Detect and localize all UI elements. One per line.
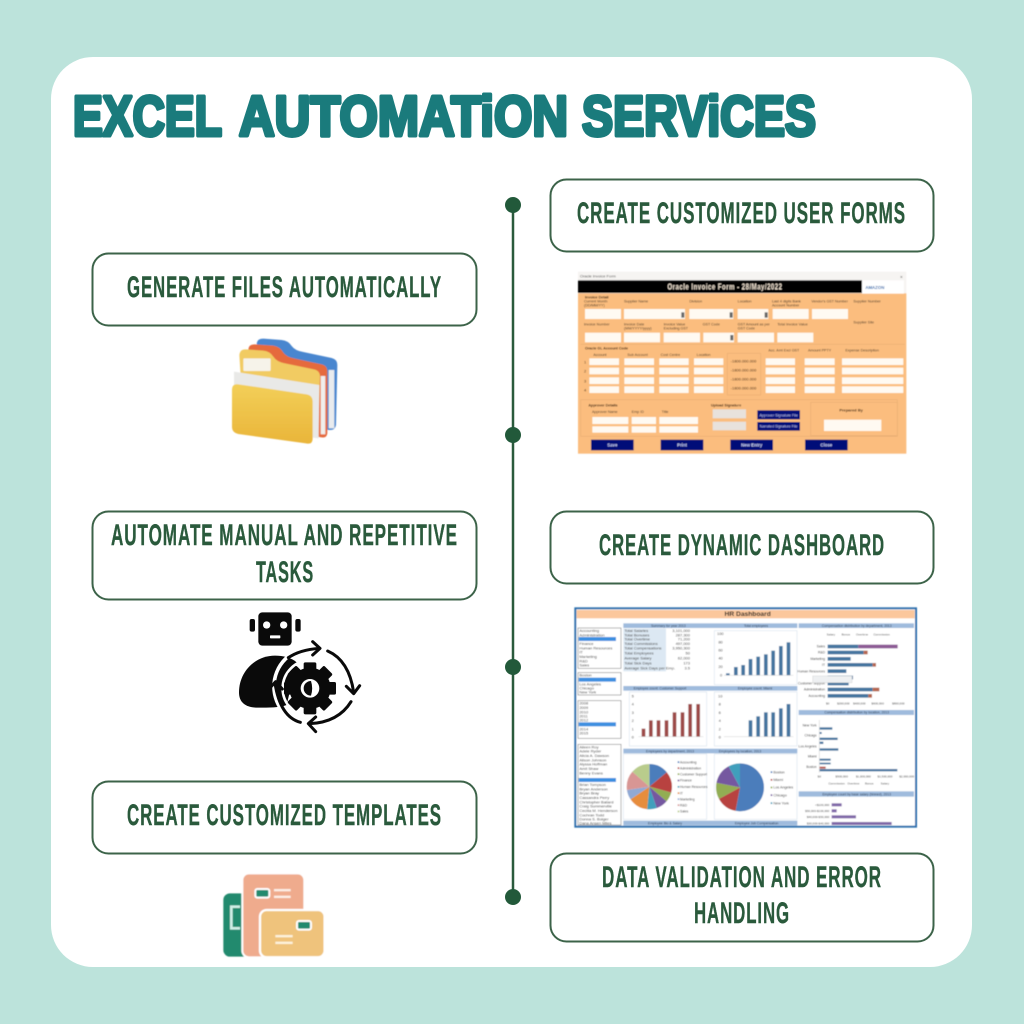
HR dashboard screenshot: Benny Evans [579, 770, 603, 775]
HR dashboard screenshot: Compensation distribution by location, 2013 [824, 711, 889, 715]
top row fields [585, 309, 848, 342]
row numbers and amounts: 2 [584, 369, 587, 374]
form field labels: Acc. Amt Excl GST [768, 349, 800, 353]
horizontal bars: compensation by location: Overtime [847, 782, 860, 786]
horizontal bars: compensation by department: $600,000 [871, 701, 884, 705]
summary table: Total Salaries [624, 628, 648, 633]
HR dashboard screenshot: 6 [719, 710, 722, 715]
box: create dynamic dashboard [550, 512, 934, 584]
horizontal bars: compensation by location: Los Angeles [799, 744, 817, 748]
HR dashboard screenshot: 80 [718, 639, 724, 644]
form field labels: Approver Name [592, 410, 618, 414]
pie legend: department: Customer Support [680, 772, 707, 776]
summary table: Total Commissions [624, 641, 658, 646]
HR dashboard screenshot: 20 [718, 664, 724, 669]
HR dashboard screenshot: 0 [719, 734, 722, 739]
HR dashboard screenshot: Dana Ansen Miles [579, 821, 611, 826]
HR dashboard screenshot: 2010 [579, 709, 589, 714]
pie legend: department: R&D [680, 803, 688, 807]
box: data validation and error handling [550, 854, 934, 942]
title [73, 84, 816, 148]
form field labels: Invoice Value [664, 323, 685, 327]
form field labels: Cost Centre [661, 353, 680, 357]
summary table: Total Sick Days [624, 660, 652, 665]
HR dashboard screenshot: 40 [718, 656, 724, 661]
form field labels: (MM/YYYY/yyyy) [624, 327, 652, 331]
horizontal bars: compensation by department: Sales [817, 645, 825, 649]
horizontal bars: compensation by department: Human Resources [797, 669, 825, 673]
HR dashboard screenshot: 2015 [579, 731, 589, 736]
invoice form screenshot [578, 272, 906, 454]
form field labels [584, 295, 882, 414]
row numbers and amounts: -1800.000.000 [731, 386, 757, 391]
HR dashboard screenshot: 60 [718, 647, 724, 652]
HR dashboard screenshot: HR Dashboard [725, 611, 771, 618]
pie legend: department: IT [680, 791, 683, 795]
horizontal bars: compensation by department: $400,000 [853, 701, 866, 705]
HR dashboard screenshot: Total employees [744, 624, 768, 628]
form field labels: Division [689, 299, 702, 303]
horizontal bars: compensation by department: Bonus [842, 633, 851, 637]
invoice form screenshot: AMAZON [865, 285, 884, 290]
form field labels: Oracle GL Account Code [585, 346, 628, 350]
HR dashboard screenshot: 100 [717, 631, 724, 636]
HR dashboard screenshot [575, 608, 916, 827]
form field labels: Amount PPTY [808, 349, 832, 353]
row numbers and amounts: -1800.000.000 [731, 358, 757, 363]
HR dashboard screenshot: Human Resources [579, 645, 612, 650]
horizontal bars: salary bins [805, 803, 892, 826]
pie legend: location: Miami [773, 778, 783, 782]
HR dashboard screenshot: Cecilia M. Henderson [579, 808, 617, 813]
box: automate manual and repetitive tasks: AUTOMATE MANUAL AND REPETITIVE [111, 519, 458, 552]
form field labels: GST Code [738, 327, 755, 331]
pie chart: by department [638, 775, 661, 798]
HR dashboard screenshot: 0 [720, 672, 723, 677]
horizontal bars: salary bins: $40,000-$50,000 [807, 815, 830, 819]
HR dashboard screenshot: Brian Tompson [579, 782, 606, 787]
form field labels: Excluding GST [664, 327, 689, 331]
HR dashboard screenshot: Aileen Roy [579, 744, 599, 749]
row numbers and amounts: -1800.000.000 [731, 377, 757, 382]
horizontal bars: compensation by location: Chicago [804, 734, 817, 738]
summary table: 62,000 [678, 656, 691, 661]
pie legend: department [678, 760, 708, 814]
row numbers and amounts: 3 [584, 378, 587, 383]
HR dashboard screenshot: Chicago [579, 686, 595, 691]
HR dashboard screenshot: Bryan Anderson [579, 786, 608, 791]
horizontal bars: compensation by department: R&D [818, 651, 826, 655]
HR dashboard screenshot: 2014 [579, 727, 589, 732]
HR dashboard screenshot: Craig Summerville [579, 804, 613, 809]
row numbers and amounts: -1800.000.000 [731, 368, 757, 373]
vertical timeline [505, 197, 521, 905]
HR dashboard screenshot: Alyssa Hoffman [579, 762, 607, 767]
summary table: 173 [683, 660, 691, 665]
summary table: 3.5 [684, 665, 691, 670]
HR dashboard screenshot: 1 [632, 726, 635, 731]
horizontal bars: compensation by department: $0 [826, 701, 830, 705]
summary table: 3,101,000 [672, 628, 691, 633]
icon: robot with gear [239, 612, 360, 732]
form field labels: Account Number [772, 303, 800, 307]
horizontal bars: compensation by department: IT [822, 663, 825, 667]
HR dashboard screenshot: Accounting [579, 628, 599, 633]
pie legend: location: New York [773, 801, 789, 805]
form field labels: GST Amount as per [738, 323, 770, 327]
icon: folders [232, 339, 337, 444]
horizontal bars: compensation by location: $500,000 [835, 774, 848, 778]
HR dashboard screenshot: Los Angeles [579, 681, 601, 686]
pie legend: department: Finance [680, 779, 692, 783]
HR dashboard screenshot: 2 [632, 718, 635, 723]
bar chart: total employees [726, 642, 790, 675]
form buttons: Print [677, 442, 687, 447]
summary table: 287,300 [676, 632, 691, 637]
pie legend: department: Accounting [680, 760, 697, 764]
box: generate files automatically: GENERATE FILES AUTOMATICALLY [127, 271, 442, 304]
HR dashboard screenshot: 0 [632, 734, 635, 739]
HR dashboard screenshot: Employee count: Miami [738, 687, 773, 691]
chart frames [623, 631, 797, 819]
pie legend: department: Marketing [680, 797, 695, 801]
form field labels: Title [662, 410, 668, 414]
summary table: 71,200 [678, 637, 691, 642]
horizontal bars: compensation by department: $200,000 [837, 701, 850, 705]
HR dashboard screenshot: 2008 [579, 701, 589, 706]
box: automate manual and repetitive tasks [92, 512, 476, 600]
horizontal bars: compensation by department [797, 633, 905, 705]
horizontal bars: compensation by location: Miami [808, 754, 817, 758]
horizontal bars: compensation by department: Finance [813, 676, 825, 680]
box: data validation and error handling: HANDLING [694, 897, 790, 930]
form buttons: New Entry [741, 442, 763, 447]
pie chart: by location [728, 775, 752, 799]
HR dashboard screenshot: New York [579, 690, 596, 695]
summary table: 3,950,300 [672, 645, 691, 650]
horizontal bars: compensation by location: New York [803, 724, 817, 728]
pie legend: department: Human Resources [680, 785, 708, 789]
summary table: Total Overtime [624, 637, 651, 642]
HR dashboard screenshot: Cochran Todd [579, 812, 604, 817]
summary table [623, 628, 691, 671]
horizontal bars: compensation by location: $1,500,000 [878, 774, 893, 778]
box: create customized templates [92, 782, 476, 854]
bar chart: customer support [642, 704, 700, 737]
form field labels: Upload Signature [711, 403, 741, 407]
form field labels: Account [593, 353, 607, 357]
HR dashboard screenshot: 4 [719, 718, 722, 723]
HR dashboard screenshot: Amit Shaw [579, 766, 598, 771]
section outlines [581, 344, 905, 436]
HR dashboard screenshot: Marketing [579, 654, 597, 659]
pie legend: department: Sales [680, 810, 689, 814]
pie legend: location: Los Angeles [773, 786, 793, 790]
form buttons: Save [607, 442, 618, 447]
horizontal bars: compensation by department: Salary [827, 633, 836, 637]
form field labels: Total Invoice Value [777, 323, 808, 327]
horizontal bars: compensation by location [799, 720, 914, 786]
HR dashboard screenshot: IT [579, 650, 583, 655]
HR dashboard screenshot: Administration [579, 632, 605, 637]
horizontal bars: salary bins: <$100,000 [815, 803, 830, 807]
invoice form screenshot: × [900, 274, 903, 279]
form field labels: Supplier Number [853, 299, 882, 303]
HR dashboard screenshot: Sales [579, 663, 589, 668]
horizontal bars: compensation by department: Overtime [856, 633, 868, 637]
HR dashboard screenshot: 4 [632, 702, 635, 707]
approver fields [592, 417, 881, 433]
summary table: Total Employees [624, 651, 654, 656]
HR dashboard screenshot: Boston [579, 672, 592, 677]
HR dashboard screenshot: 2 [719, 726, 722, 731]
horizontal bars: compensation by department: Marketing [810, 657, 825, 661]
horizontal bars: compensation by location: Salary [881, 782, 890, 786]
form field labels: Last 4 digits Bank [772, 299, 801, 303]
HR dashboard screenshot: Bryan Bray [579, 791, 599, 796]
HR dashboard screenshot: Employee count by base salary (binned), 2013 [822, 792, 891, 796]
form field labels: GST Code [703, 323, 720, 327]
form field labels: Current Month [584, 299, 607, 303]
circular arrows [269, 642, 360, 732]
section headers [623, 623, 914, 825]
horizontal bars: compensation by department: $800,000 [892, 701, 905, 705]
box: create customized templates: CREATE CUSTOMIZED TEMPLATES [127, 799, 442, 832]
horizontal bars: compensation by location: Bonus [865, 782, 874, 786]
HR dashboard screenshot: 8 [719, 702, 722, 707]
form field labels: Emp ID [632, 410, 644, 414]
form buttons: Narrated Signature File [760, 425, 798, 429]
row numbers and amounts: 1 [584, 359, 587, 364]
HR dashboard screenshot: 10 [718, 694, 723, 699]
summary table: Average Salary [624, 656, 652, 661]
HR dashboard screenshot: 2011 [579, 714, 589, 719]
row numbers and amounts [584, 358, 757, 392]
form field labels: Vendor's GST Number [811, 299, 849, 303]
horizontal bars: compensation by location: $2,000,000 [899, 774, 914, 778]
bar chart: miami [749, 704, 790, 737]
form field labels: Supplier Name [624, 299, 648, 303]
form field labels: Invoice Date [624, 323, 644, 327]
horizontal bars: compensation by department: Customer Support [798, 682, 825, 686]
HR dashboard screenshot: Employee count: Customer Support [634, 687, 686, 691]
HR dashboard screenshot: Cassandra Perry [579, 795, 609, 800]
title: EXCEL [73, 84, 222, 148]
form buttons [591, 410, 848, 450]
HR dashboard screenshot: Employees by department, 2013 [646, 749, 694, 753]
HR dashboard screenshot: Donna S. Bolger [579, 817, 609, 822]
pie legend: location [771, 770, 793, 805]
icon: templates [223, 873, 325, 957]
horizontal bars: compensation by location: Commission [828, 782, 845, 786]
box: automate manual and repetitive tasks: TASKS [256, 556, 314, 589]
HR dashboard screenshot: Alicia A. Dawson [579, 753, 609, 758]
HR dashboard screenshot: 3 [632, 710, 635, 715]
account code grid [589, 358, 903, 393]
horizontal bars: compensation by department: Administration [804, 688, 825, 692]
pie legend: location: Chicago [773, 793, 787, 797]
form field labels: Sub Account [627, 353, 648, 357]
HR dashboard screenshot: Finance [579, 641, 594, 646]
HR dashboard screenshot: R&D [579, 658, 588, 663]
title: AUTOMATiON [239, 84, 568, 148]
horizontal bars: compensation by department: Accounting [809, 694, 825, 698]
form field labels: (DD/MM/YY) [584, 303, 605, 307]
horizontal bars: compensation by department: Commission [873, 633, 890, 637]
white main panel [51, 57, 972, 967]
summary table: Total Bonuses [624, 632, 649, 637]
horizontal bars: compensation by location: $1,000,000 [856, 774, 871, 778]
form field labels: Approver Details [588, 403, 618, 407]
form buttons: Close [820, 442, 833, 447]
HR dashboard screenshot: 5 [632, 694, 635, 699]
form field labels: Invoice Detail [585, 295, 609, 299]
summary table: Total Compensations [624, 645, 662, 650]
invoice form screenshot: Oracle Invoice Form - 28/May/2022 [667, 283, 782, 292]
form buttons: Approver Signature File [759, 413, 798, 417]
form field labels: Expense Description [845, 349, 879, 353]
form field labels: Supplier Site [853, 321, 874, 325]
summary table: Average Sick Days per Emp. [624, 665, 675, 670]
horizontal bars: salary bins: $30,000-$40,000 [807, 822, 830, 826]
horizontal bars: compensation by location: $0 [818, 774, 821, 778]
form field labels: Prepared By [839, 408, 864, 413]
slicer lists [578, 628, 621, 825]
horizontal bars: salary bins: $50,000-$100,000 [805, 809, 830, 813]
pie legend: location: Boston [773, 770, 785, 774]
form field labels: Location [738, 299, 751, 303]
form field labels: Invoice Number [584, 323, 610, 327]
invoice form screenshot: Oracle Invoice Form [580, 274, 617, 279]
HR dashboard screenshot: Adele Ryder [579, 749, 602, 754]
HR dashboard screenshot: Employees by location, 2013 [719, 749, 761, 753]
HR dashboard screenshot: Employee Job Compensation [735, 821, 779, 825]
dropdown spinners [681, 312, 768, 340]
summary table: 50 [686, 651, 691, 656]
pie legend: department: Administration [680, 766, 701, 770]
row numbers and amounts: 4 [584, 387, 587, 392]
HR dashboard screenshot: 2012 [579, 718, 589, 723]
gear [284, 662, 336, 714]
form field labels: Location [697, 353, 710, 357]
horizontal bars: compensation by location: Boston [806, 765, 817, 769]
HR dashboard screenshot: Employee Bio & Salary [648, 821, 682, 825]
HR dashboard screenshot: 2009 [579, 705, 589, 710]
HR dashboard screenshot: Christopher Ballard [579, 799, 613, 804]
box: generate files automatically [92, 254, 476, 326]
HR dashboard screenshot: Alison Johnson [579, 757, 606, 762]
title: SERViCES [582, 84, 816, 148]
summary table: 497,000 [676, 641, 691, 646]
HR dashboard screenshot: Summary for year 2013 [651, 624, 686, 628]
HR dashboard screenshot: Compensation distribution by department, 2013 [822, 624, 892, 628]
box: create customized user forms [550, 180, 934, 252]
